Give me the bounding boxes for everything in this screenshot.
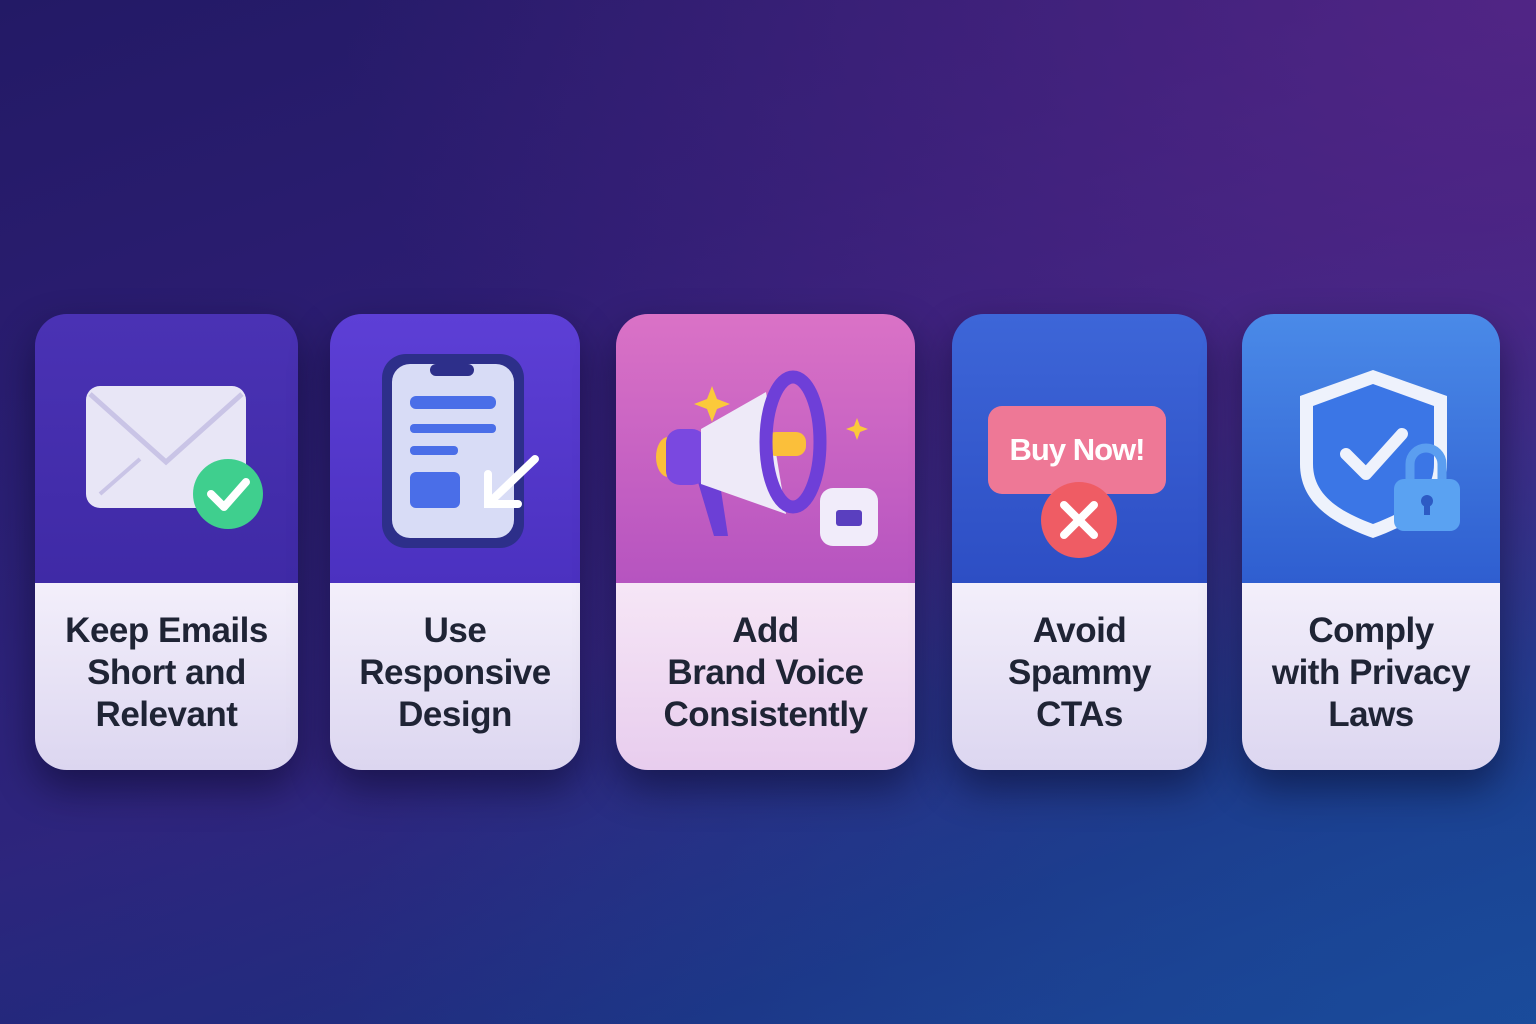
label	[35, 583, 298, 770]
card 5: privacy laws	[1242, 314, 1500, 770]
card 2: responsive design: Design	[398, 694, 512, 734]
card 4: spammy CTAs: Avoid	[1033, 610, 1126, 650]
icon: buy now button with x	[988, 406, 1166, 558]
card 3: brand voice: Add	[732, 610, 799, 650]
card 3: brand voice: Consistently	[663, 694, 868, 734]
card 5: privacy laws: Comply	[1308, 610, 1434, 650]
label: Relevant	[96, 694, 237, 734]
icon: envelope with check	[86, 386, 263, 529]
card 4: spammy CTAs: Spammy	[1008, 652, 1151, 692]
card 2: responsive design: Use	[424, 610, 486, 650]
card 2: responsive design	[330, 314, 580, 770]
card 4: spammy CTAs	[952, 314, 1207, 770]
card 3: brand voice: Brand Voice	[667, 652, 864, 692]
card 5: privacy laws: Laws	[1328, 694, 1414, 734]
card 1: keep emails short	[35, 314, 298, 770]
icon: shield with lock	[1300, 370, 1460, 538]
card 3: brand voice	[616, 314, 915, 770]
card 5: privacy laws: with Privacy	[1272, 652, 1470, 692]
label: Short and	[87, 652, 246, 692]
icon: megaphone	[656, 370, 878, 546]
label: Keep Emails	[65, 610, 268, 650]
icon: buy now button with x: Buy Now!	[1010, 432, 1144, 467]
card 4: spammy CTAs: CTAs	[1036, 694, 1123, 734]
icon: phone	[382, 354, 539, 548]
card 2: responsive design: Responsive	[359, 652, 551, 692]
